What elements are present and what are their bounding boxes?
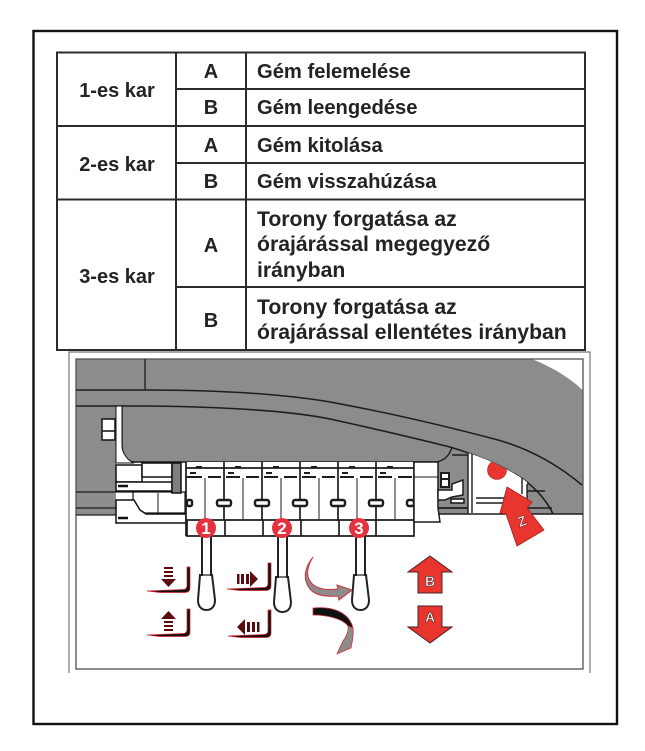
icon: counter-clockwise rotation arrow xyxy=(313,608,353,654)
row group: 3-es kar: Torony forgatása az xyxy=(257,208,457,231)
row group: 2-es kar: A xyxy=(204,135,218,157)
illustration: control levers xyxy=(76,359,583,669)
arrow B up xyxy=(408,556,452,593)
icon: lever 1 lowering xyxy=(147,567,190,592)
valve block xyxy=(186,462,414,536)
row group: 3-es kar: Torony forgatása az xyxy=(257,296,457,319)
lever number badges: 2 xyxy=(277,519,287,538)
illustration border xyxy=(76,359,583,669)
arrow Z: Z xyxy=(515,512,529,530)
arrow Z xyxy=(500,487,544,546)
icon: lever 2 extending xyxy=(227,563,271,590)
body detail lines xyxy=(76,359,145,515)
row group: 1-es kar: Gém leengedése xyxy=(257,97,417,119)
row group: 3-es kar: irányban xyxy=(257,259,345,282)
levers xyxy=(198,536,369,612)
white housing with red dot xyxy=(438,453,583,514)
row group: 1-es kar: A xyxy=(204,61,218,83)
row group: 1-es kar: Gém felemelése xyxy=(257,61,411,83)
row group: 3-es kar: B xyxy=(204,310,218,332)
grey machine body xyxy=(76,360,582,515)
lever number badges: 1 xyxy=(201,519,211,538)
lever 3 xyxy=(352,536,369,610)
table: lever functions xyxy=(57,52,585,350)
boom contour xyxy=(76,406,553,514)
row group: 2-es kar xyxy=(79,135,437,193)
row group: 2-es kar: Gém visszahúzása xyxy=(257,171,437,193)
icon: lever 1 raising xyxy=(147,609,190,636)
row group: 1-es kar xyxy=(79,61,417,119)
upper body contour xyxy=(76,390,582,485)
left bolt xyxy=(102,419,115,440)
icon: lever 2 retracting xyxy=(228,610,271,638)
row group: 2-es kar: Gém kitolása xyxy=(257,135,383,157)
valve clips xyxy=(187,500,414,506)
row group: 3-es kar: 3-es kar xyxy=(79,266,155,288)
lever number badges: 3 xyxy=(354,519,364,538)
thin illustration outer frame xyxy=(69,352,590,673)
lever 2 xyxy=(274,536,291,612)
row group: 3-es kar: órajárással megegyező xyxy=(257,233,490,256)
arrow A down: A xyxy=(425,609,435,625)
arrow B up: B xyxy=(425,573,435,589)
row group: 1-es kar: B xyxy=(204,97,218,119)
row group: 3-es kar: órajárással ellentétes irányban xyxy=(257,321,567,344)
row group: 2-es kar: 2-es kar xyxy=(79,154,155,176)
row group: 1-es kar: 1-es kar xyxy=(79,80,155,102)
right end of valve block xyxy=(414,462,468,522)
arrow A down xyxy=(408,606,452,643)
icon: clockwise rotation arrow xyxy=(305,557,352,600)
row group: 2-es kar: B xyxy=(204,171,218,193)
row group: 3-es kar: A xyxy=(204,235,218,257)
left mounting bracket xyxy=(116,406,186,523)
lever number badges xyxy=(196,518,369,538)
row group: 3-es kar xyxy=(79,208,567,344)
lever 1 xyxy=(198,536,215,610)
